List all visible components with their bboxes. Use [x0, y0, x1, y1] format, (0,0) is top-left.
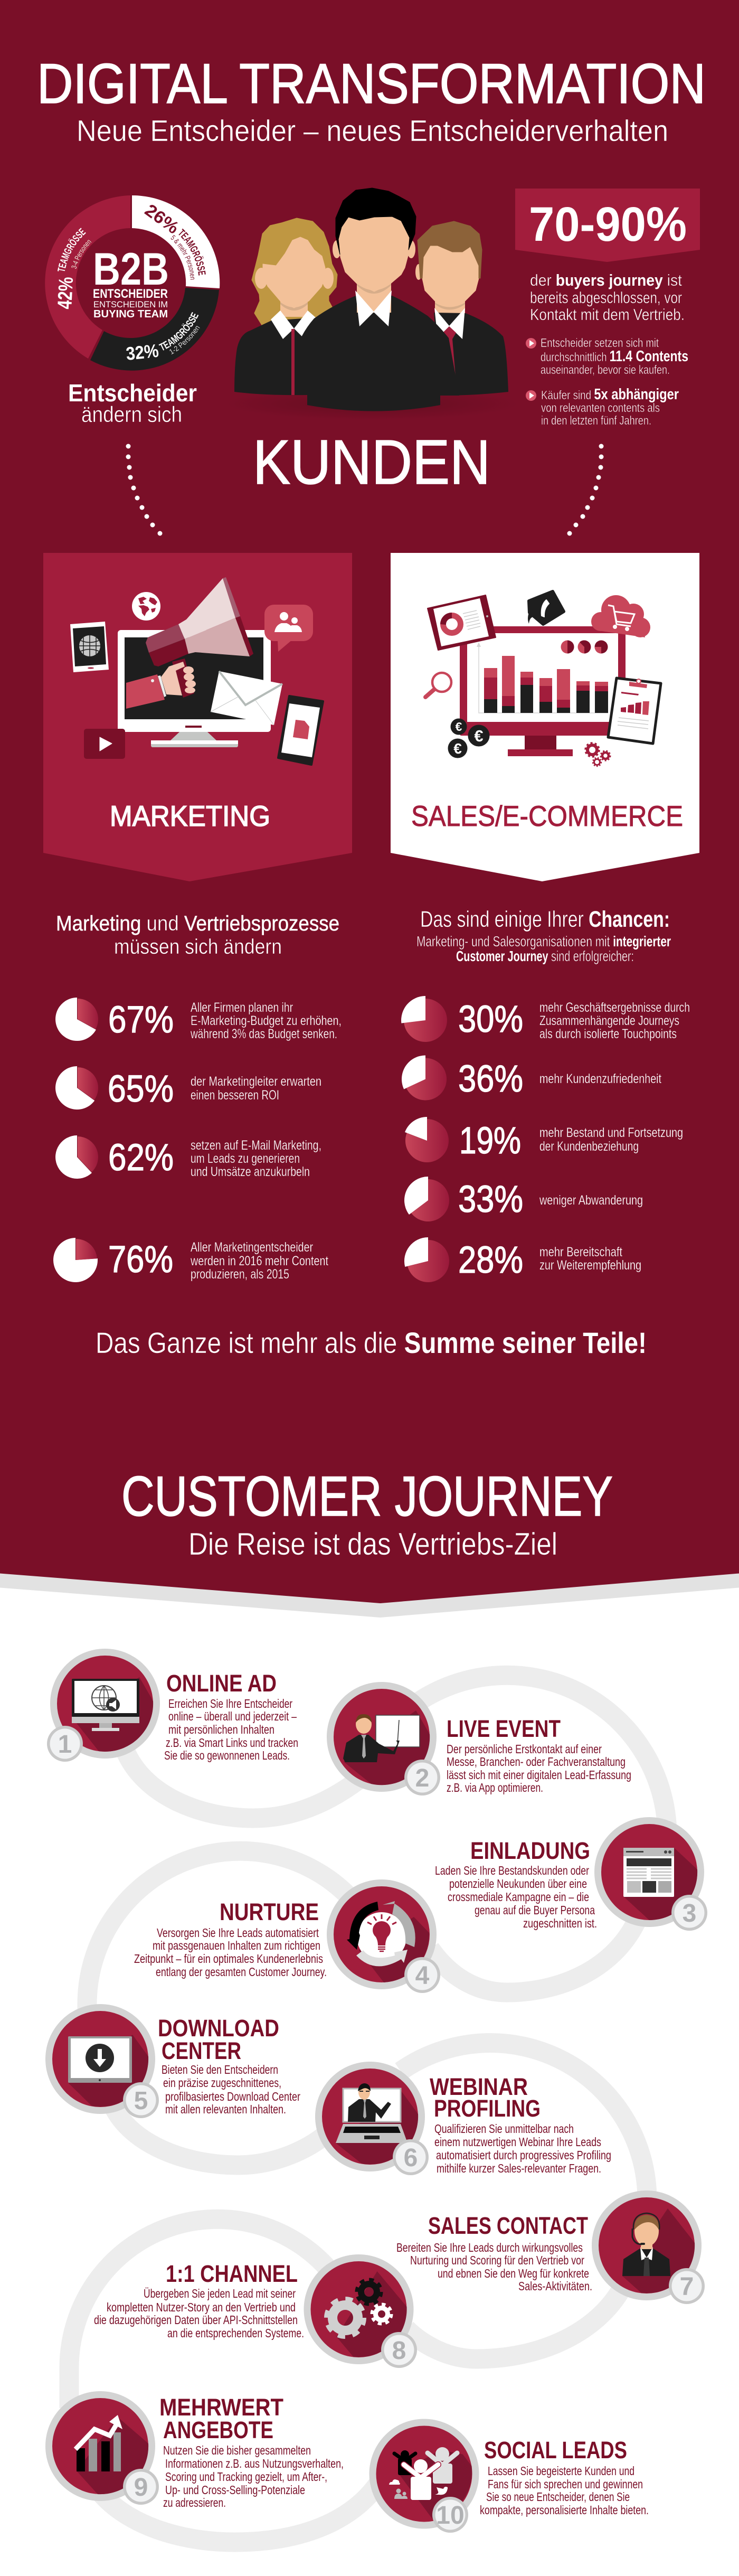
stat: 76%: 76%: [108, 1239, 173, 1281]
stat: 67%: E-Marketing-Budget zu erhöhen,: [191, 1013, 342, 1028]
stat: 76%: werden in 2016 mehr Content: [190, 1254, 328, 1268]
icon: cheering people: [389, 2447, 457, 2500]
step 3: einladung: [435, 1817, 707, 1931]
dotted arrow left: [126, 444, 163, 535]
heading: Marketing und Vertriebsprozesse: müssen sich ändern: [114, 935, 282, 958]
badge 6: [393, 2139, 429, 2175]
step text: Qualifizieren Sie unmittelbar nach: [434, 2122, 574, 2136]
man centre: [291, 188, 459, 411]
stat: 62%: 62%: [108, 1137, 174, 1179]
step 4: nurture: [134, 1879, 440, 1993]
step text: mit allen relevanten Inhalten.: [165, 2102, 286, 2116]
stat: 62%: [55, 1135, 321, 1179]
step text: Scoring und Tracking gezielt, um After-,: [165, 2470, 327, 2484]
step title: SALES CONTACT: [428, 2212, 588, 2239]
heading: Chancen: Marketing- und Salesorganisationen mit integrierter: [416, 933, 671, 949]
donut centre text: B2B: [93, 244, 169, 295]
stat: 28%: zur Weiterempfehlung: [539, 1258, 641, 1273]
step text: [163, 2443, 344, 2509]
badge 4: 4: [415, 1962, 430, 1990]
stat: 30%: Zusammenhängende Journeys: [539, 1013, 679, 1028]
step text: lässt sich mit einer digitalen Lead-Erfassung: [447, 1768, 631, 1782]
segment: 32% team size 1-2: 1-2 Personen: [169, 326, 200, 355]
stat: 33%: [404, 1177, 643, 1221]
stat: 65%: der Marketingleiter erwarten: [191, 1074, 321, 1089]
icon: laptop with presenter: [336, 2083, 408, 2143]
stat: 65%: 65%: [108, 1068, 174, 1110]
badge 8: 8: [392, 2337, 406, 2365]
step title: MEHRWERT: [159, 2394, 283, 2421]
stat: 67%: während 3% das Budget senken.: [190, 1027, 337, 1041]
badge 2: 2: [415, 1764, 429, 1792]
bullet: 11.4 Contents: durchschnittlich 11.4 Contents: [541, 348, 688, 365]
journey path: [69, 1675, 667, 2542]
step text: entlang der gesamten Customer Journey.: [156, 1965, 327, 1979]
step text: [447, 1742, 631, 1794]
step 9: mehrwert angebote: [45, 2391, 344, 2509]
heading: Chancen: Customer Journey sind erfolgreicher:: [456, 948, 634, 964]
step text: online – überall und jederzeit –: [168, 1709, 297, 1723]
heading: KUNDEN: KUNDEN: [253, 427, 490, 497]
step text: mithilfe kurzer Sales-relevanter Fragen.: [437, 2161, 601, 2175]
icon: smartphone with document: [278, 696, 323, 765]
bullet: 5x abhängiger: [526, 386, 679, 427]
step text: Zeitpunkt – für ein optimales Kundenerlebnis: [134, 1952, 323, 1966]
circle: [45, 2391, 155, 2501]
step text: an die entsprechenden Systeme.: [167, 2326, 304, 2340]
step text: z.B. via App optimieren.: [447, 1781, 543, 1794]
step text: Sales-Aktivitäten.: [518, 2279, 592, 2293]
step text: Up- und Cross-Selling-Potenziale: [165, 2483, 305, 2497]
icon: phone bubble: [528, 591, 564, 624]
step text: z.B. via Smart Links und tracken: [166, 1736, 298, 1750]
icon: magnifier: [425, 673, 451, 697]
step text: zugeschnitten ist.: [523, 1916, 597, 1930]
step text: Sie die so gewonnenen Leads.: [164, 1748, 290, 1762]
step text: [164, 1697, 298, 1762]
badge 7: [669, 2268, 705, 2304]
callout banner: 70-90%: 70-90%: [529, 198, 687, 251]
step text: Der persönliche Erstkontakt auf einer: [447, 1742, 602, 1756]
donut centre text: [93, 244, 169, 320]
dotted arrow right: [567, 444, 604, 535]
step text: Fans für sich sprechen und gewinnen: [488, 2477, 643, 2491]
stat: 67%: [55, 998, 342, 1041]
step text: potenzielle Neukunden über eine: [449, 1877, 587, 1891]
bullet: 11.4 Contents: auseinander, bevor sie kaufen.: [541, 363, 670, 377]
text block: buyers journey: Kontakt mit dem Vertrieb.: [530, 305, 685, 324]
circle: [369, 2419, 479, 2528]
step text: und ebnen Sie den Weg für konkrete: [438, 2267, 589, 2280]
icon: envelope: [211, 671, 282, 725]
stat: 30%: als durch isolierte Touchpoints: [539, 1027, 677, 1041]
badge 1: 1: [58, 1731, 72, 1759]
statement: Das Ganze ist mehr: Das Ganze ist mehr als die Summe seiner Teile!: [96, 1326, 647, 1359]
step text: [134, 1926, 327, 1979]
step text: Bereiten Sie Ihre Leads durch wirkungsvolles: [396, 2241, 583, 2254]
label: SALES/E-COMMERCE: SALES/E-COMMERCE: [411, 800, 683, 832]
segment: 32% team size 1-2: TEAMGRÖSSE: [158, 312, 198, 351]
step text: einem nutzwertigen Webinar Ihre Leads: [434, 2135, 601, 2149]
step text: [162, 2063, 300, 2116]
step title: SOCIAL LEADS: [484, 2437, 627, 2464]
step text: [434, 2122, 611, 2175]
step text: die dazugehörigen Daten über API-Schnittstellen: [94, 2313, 298, 2327]
segment: 26% team size 5 and more: 26%: [141, 200, 183, 238]
subtitle: Neue Entscheider – neues Entscheiderverhalten: [77, 114, 668, 148]
stat: 33%: weniger Abwanderung: [539, 1193, 643, 1208]
panel: marketing: [43, 553, 352, 881]
badge 3: [671, 1895, 707, 1931]
step text: kompakte, personalisierte Inhalte bieten.: [480, 2503, 649, 2517]
step title: EINLADUNG: [470, 1837, 590, 1864]
badge 4: [404, 1957, 440, 1993]
step text: Nutzen Sie die bisher gesammelten: [163, 2443, 311, 2457]
icon: tablet with globe: [70, 622, 109, 672]
segment: 42% team size 3-4: [45, 195, 130, 359]
stat: 67%: 67%: [108, 999, 174, 1041]
step text: Erreichen Sie Ihre Entscheider: [168, 1697, 292, 1710]
bullet: 11.4 Contents: [526, 336, 688, 377]
stat: 62%: setzen auf E-Mail Marketing,: [191, 1138, 321, 1153]
step 1: online ad: [47, 1649, 298, 1762]
step text: Informationen z.B. aus Nutzungsverhalten,: [165, 2457, 344, 2470]
icon: world: [132, 592, 160, 621]
step text: [94, 2287, 304, 2340]
stat: 62%: um Leads zu generieren: [191, 1151, 300, 1166]
step text: Sie so neue Entscheider, denen Sie: [486, 2490, 630, 2504]
woman: [234, 219, 337, 395]
heading: Chancen: Das sind einige Ihrer Chancen:: [420, 907, 670, 932]
circle: [592, 2190, 702, 2300]
icon: gears: [327, 2280, 392, 2336]
step text: mit persönlichen Inhalten: [168, 1723, 274, 1736]
step title: [430, 2073, 541, 2122]
donut centre text: ENTSCHEIDEN IM: [93, 299, 168, 309]
icon: monitor: [118, 630, 271, 747]
badge 10: 10: [436, 2502, 465, 2530]
step title: WEBINAR: [430, 2073, 528, 2100]
stat: 30%: [401, 996, 690, 1042]
stat: 76%: Aller Marketingentscheider: [191, 1240, 313, 1255]
segment: 26% team size 5 and more: [132, 195, 220, 288]
badge 5: [123, 2082, 159, 2118]
circle: [45, 2004, 155, 2114]
heading: Customer Journey: CUSTOMER JOURNEY: [121, 1464, 613, 1528]
bullet: 5x abhängiger: in den letzten fünf Jahren.: [541, 413, 651, 427]
icon: call agent with headset: [622, 2213, 670, 2276]
bullet: 5x abhängiger: Käufer sind 5x abhängiger: [541, 386, 679, 403]
stat: 65%: [55, 1066, 321, 1110]
step text: [396, 2241, 592, 2293]
step title: [159, 2394, 283, 2443]
donut centre text: BUYING TEAM: [93, 308, 168, 320]
circle: [304, 2254, 414, 2364]
icon: tablet with donut: [428, 595, 496, 650]
step title: LIVE EVENT: [447, 1715, 561, 1742]
stat: 65%: einen besseren ROI: [191, 1088, 279, 1103]
text block: buyers journey: [530, 271, 685, 324]
icon: light bulb with cycle arrows: [347, 1901, 415, 1966]
stat: 28%: 28%: [458, 1239, 523, 1281]
segment: 42% team size 3-4: TEAMGRÖSSE: [57, 228, 86, 271]
heading: Marketing und Vertriebsprozesse: Marketing und Vertriebsprozesse: [56, 912, 339, 935]
small pies: [561, 640, 608, 654]
step title: ANGEBOTE: [163, 2417, 273, 2443]
label: MARKETING: MARKETING: [110, 800, 270, 832]
step title: ONLINE AD: [166, 1670, 277, 1697]
segment: 42% team size 3-4: 42%: [54, 276, 78, 309]
step 5: download center: [45, 2004, 300, 2118]
text block: buyers journey: bereits abgeschlossen, vor: [530, 288, 682, 307]
panel: sales / e-commerce: [391, 553, 699, 881]
step text: Versorgen Sie Ihre Leads automatisiert: [157, 1926, 319, 1940]
step 7: sales contact: [396, 2190, 705, 2304]
step text: Bieten Sie den Entscheidern: [162, 2063, 278, 2076]
icon: monitor with bar chart: [460, 626, 626, 756]
step text: mit passgenauen Inhalten zum richtigen: [153, 1939, 320, 1952]
circle: [50, 1649, 160, 1759]
badge 8: [381, 2332, 417, 2368]
step title: DOWNLOAD: [158, 2015, 279, 2042]
icon: clipboard: [608, 678, 661, 744]
badge 6: 6: [404, 2144, 418, 2172]
maroon top section: [0, 0, 739, 1603]
step text: profilbasiertes Download Center: [165, 2090, 300, 2103]
step 10: social leads: [369, 2419, 649, 2533]
icon: euro coins: €: [456, 720, 462, 734]
stat: 30%: 30%: [458, 999, 523, 1040]
step title: 1:1 CHANNEL: [166, 2260, 298, 2287]
caption: Entscheider ändern sich: ändern sich: [81, 402, 182, 427]
badge 2: [404, 1760, 440, 1795]
circle: [315, 2062, 425, 2171]
icon: euro coins: €: [474, 727, 484, 745]
stat: 28%: [404, 1237, 641, 1282]
stat: 36%: 36%: [458, 1058, 523, 1100]
callout banner: 70-90%: [515, 189, 700, 262]
badge 7: 7: [680, 2273, 694, 2301]
step text: ein präzise zugeschnittenes,: [163, 2076, 281, 2090]
stacked bars: [484, 656, 608, 713]
subheading: Die Reise ist das Vertriebs-Ziel: Die Reise ist das Vertriebs-Ziel: [188, 1527, 557, 1562]
heading: Chancen: [416, 907, 671, 964]
donut chart: buying team size: [45, 195, 220, 371]
step title: CENTER: [162, 2037, 241, 2064]
step title: PROFILING: [434, 2095, 541, 2122]
step text: automatisiert durch progressives Profiling: [436, 2148, 611, 2162]
segment: 42% team size 3-4: 3-4 Personen: [71, 240, 92, 269]
step text: Laden Sie Ihre Bestandskunden oder: [435, 1864, 589, 1877]
circle: [327, 1879, 437, 1989]
step text: kompletten Nutzer-Story an den Vertrieb und: [107, 2300, 296, 2314]
icon: download monitor: [68, 2036, 132, 2083]
stat: 76%: produzieren, als 2015: [191, 1267, 289, 1282]
step text: zu adressieren.: [163, 2496, 226, 2509]
step text: genau auf die Buyer Persona: [475, 1903, 595, 1917]
stat: 19%: [405, 1117, 683, 1162]
segment: 26% team size 5 and more: TEAMGRÖSSE: [178, 228, 206, 276]
step text: [435, 1864, 597, 1930]
circle: [327, 1682, 437, 1792]
stat: 19%: der Kundenbeziehung: [539, 1139, 639, 1154]
stat: 30%: mehr Geschäftsergebnisse durch: [539, 1000, 690, 1015]
step text: Messe, Branchen- oder Fachveranstaltung: [447, 1755, 626, 1769]
badge 3: 3: [683, 1900, 696, 1928]
icon: cloud with cart: [591, 595, 650, 637]
caption: Entscheider ändern sich: Entscheider: [68, 379, 197, 407]
badge 9: [123, 2469, 159, 2505]
man right: [415, 221, 508, 396]
step title: NURTURE: [220, 1898, 319, 1925]
icon: growth chart: [75, 2415, 122, 2471]
icon: newsletter: [623, 1848, 674, 1897]
stat: 36%: [402, 1055, 661, 1101]
stat: 19%: mehr Bestand und Fortsetzung: [539, 1125, 683, 1140]
segment: 32% team size 1-2: 32%: [125, 341, 159, 364]
step text: [480, 2464, 649, 2517]
segment: 32% team size 1-2: [90, 288, 219, 371]
grey chevron band: [0, 1568, 739, 1618]
icon: monitor with globe: [72, 1679, 139, 1731]
icon: euro coins: €: [453, 740, 462, 757]
text block: buyers journey: der buyers journey ist: [530, 271, 682, 289]
step 2: live event: [327, 1682, 631, 1795]
illustration: three business people: [224, 188, 520, 420]
icon: presenter at board: [343, 1714, 420, 1762]
donut centre text: ENTSCHEIDER: [93, 287, 168, 301]
badge 5: 5: [134, 2087, 148, 2115]
stat: 28%: mehr Bereitschaft: [539, 1245, 622, 1259]
stat: 36%: mehr Kundenzufriedenheit: [539, 1071, 661, 1086]
step text: Übergeben Sie jeden Lead mit seiner: [144, 2287, 296, 2300]
stat: 67%: Aller Firmen planen ihr: [191, 1000, 293, 1015]
bullet: 5x abhängiger: von relevanten contents als: [541, 401, 660, 415]
badge 1: [47, 1726, 83, 1762]
step text: Lassen Sie begeisterte Kunden und: [488, 2464, 634, 2478]
step 8: 1:1 channel: [94, 2254, 417, 2368]
icon: video play button: [84, 729, 125, 759]
icon: speech bubble with people: [264, 605, 313, 652]
step 6: webinar profiling: [315, 2062, 611, 2175]
badge 10: [432, 2497, 468, 2533]
circle: [594, 1817, 704, 1927]
icon: euro coins: [448, 718, 490, 758]
segment: 26% team size 5 and more: 5 & mehr Personen: [171, 234, 194, 280]
badge 9: 9: [134, 2474, 148, 2502]
icon: gears: [585, 743, 610, 766]
step title: [158, 2015, 279, 2064]
step text: Nurturing und Scoring für den Vertrieb vor: [410, 2253, 584, 2267]
stat: 19%: 19%: [459, 1120, 521, 1162]
icon: megaphone with hand: [126, 577, 253, 709]
stat: 76%: [53, 1238, 328, 1282]
caption: Entscheider ändern sich: [68, 379, 197, 427]
bullet: 11.4 Contents: Entscheider setzen sich mit: [541, 336, 659, 350]
heading: Marketing und Vertriebsprozesse: [56, 912, 339, 958]
stat: 62%: und Umsätze anzukurbeln: [191, 1164, 310, 1179]
step text: crossmediale Kampagne ein – die: [448, 1890, 589, 1904]
stat: 33%: 33%: [458, 1179, 523, 1220]
